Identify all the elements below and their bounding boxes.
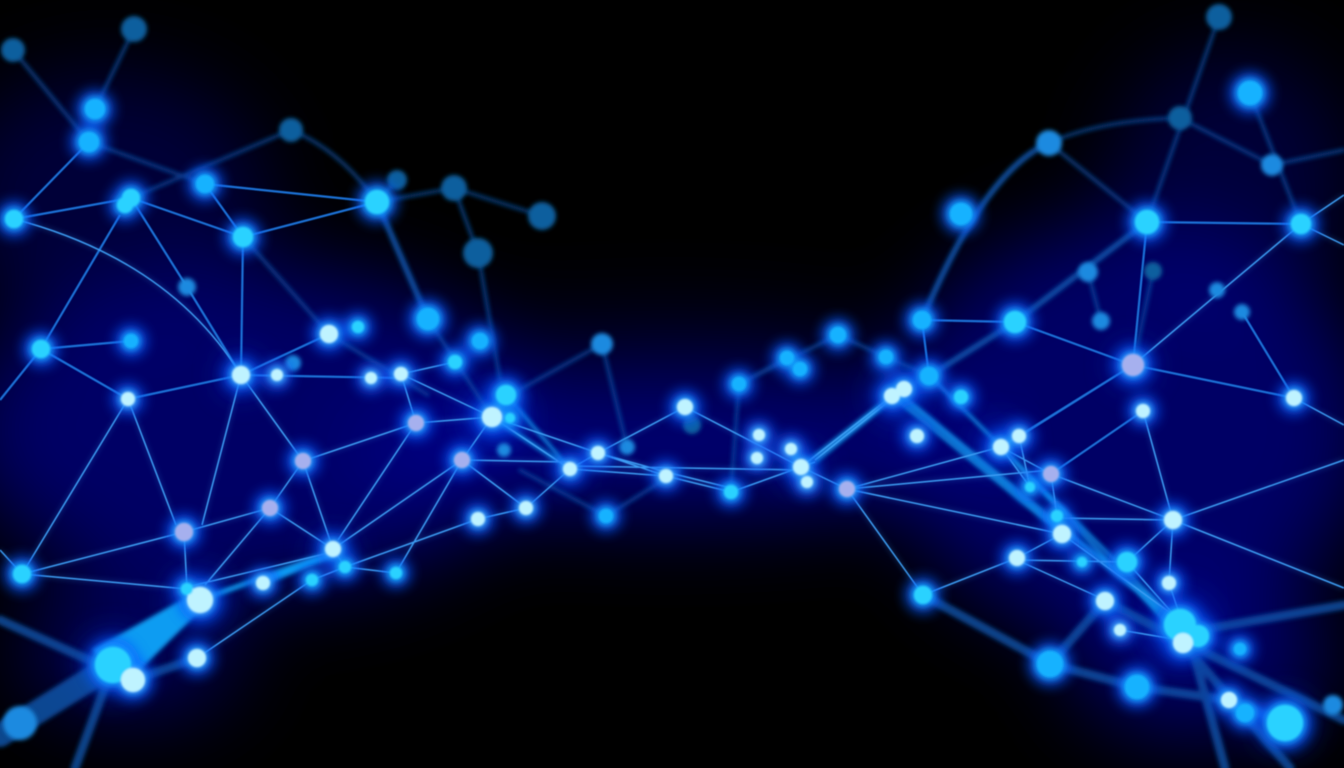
upper soft links xyxy=(0,142,1301,474)
thin network links xyxy=(0,195,1344,658)
bright light bundles xyxy=(92,376,1183,682)
diffuse hot spots xyxy=(83,347,1311,749)
thin link glow xyxy=(0,195,1344,658)
